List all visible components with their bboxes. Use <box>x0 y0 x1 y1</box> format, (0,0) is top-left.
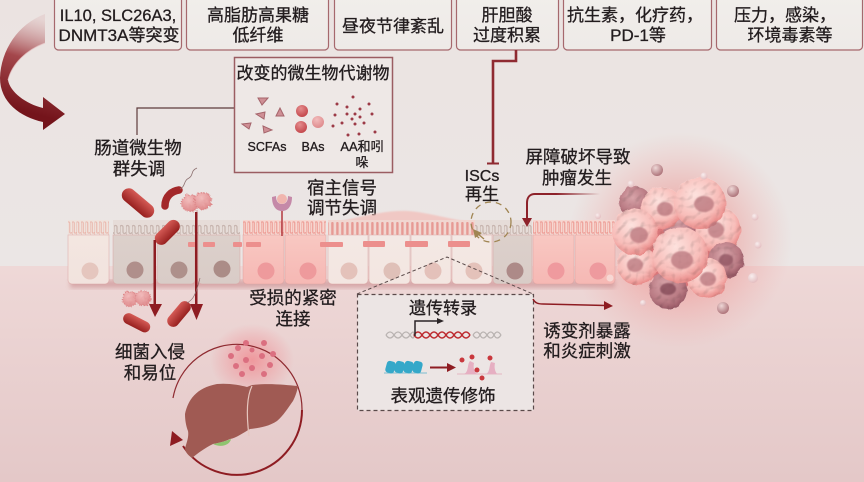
box: mutations: IL10, SLC26A3, <box>60 7 176 25</box>
arrow: mutagen exposure <box>533 299 613 310</box>
tumour mass <box>595 164 762 314</box>
liver <box>185 384 298 458</box>
label: host signalling: 调节失调 <box>307 198 377 218</box>
heading: epigenetic modification: 表观遗传修饰 <box>390 386 496 406</box>
cycle arc <box>173 344 302 410</box>
tumour nuclei <box>627 196 733 295</box>
box: mutations <box>54 0 182 50</box>
icon: epigenetic modification <box>457 354 502 380</box>
label: host signalling <box>307 178 377 218</box>
inhibition line from bile acids to ISCs <box>487 50 516 164</box>
label: barrier damage: 肿瘤发生 <box>542 168 612 188</box>
label: bacterial invasion: 和易位 <box>124 363 176 383</box>
icon: AA and indole dots <box>332 96 376 136</box>
shadow <box>70 280 615 288</box>
microvilli <box>68 220 615 235</box>
factor boxes row <box>54 0 862 50</box>
glow <box>210 324 294 396</box>
label: dysbiosis <box>94 138 182 179</box>
label: mutagen exposure and inflammation: 诱变剂暴露 <box>543 321 631 341</box>
label: damaged tight junction: 连接 <box>276 309 310 329</box>
label: bacterial invasion: 细菌入侵 <box>115 342 185 362</box>
ISC dashed circle <box>471 202 511 242</box>
metabolite labels: SCFAs <box>248 140 286 154</box>
label: dysbiosis: 群失调 <box>113 159 165 179</box>
metabolite labels: AA和吲 <box>340 139 384 154</box>
icon: bacteria above epithelium <box>119 168 212 248</box>
box: circadian: 昼夜节律紊乱 <box>342 17 444 36</box>
label: ISC regeneration <box>465 168 499 204</box>
dashed zoom lines <box>357 257 533 294</box>
connector: metabolites to dysbiosis <box>137 108 234 135</box>
box: drugs: 抗生素，化疗药， <box>567 6 703 25</box>
floating spheres <box>595 164 762 314</box>
label: ISC regeneration: 再生 <box>465 185 499 204</box>
gallbladder <box>213 439 231 446</box>
box: stress <box>716 0 862 50</box>
tumour cells <box>612 177 744 309</box>
label: host signalling: 宿主信号 <box>307 178 377 198</box>
cells <box>68 235 615 284</box>
panel: altered microbial metabolites <box>234 58 392 172</box>
liver circle with cycle arrow <box>170 324 302 475</box>
label: damaged tight junction: 受损的紧密 <box>249 288 337 308</box>
panel title: 改变的微生物代谢物 <box>236 64 390 83</box>
bacteria dots <box>228 340 276 377</box>
box: bile acids: 过度积累 <box>473 26 541 45</box>
heading: transcription: 遗传转录 <box>409 299 477 318</box>
box: bile acids <box>456 0 558 50</box>
metabolite labels: 哚 <box>355 155 369 170</box>
box: stress: 环境毒素等 <box>748 26 832 45</box>
box: bile acids: 肝胆酸 <box>482 6 532 25</box>
nuclei <box>82 260 614 282</box>
panel: transcription and epigenetics <box>358 294 534 410</box>
liver fissure <box>247 386 252 436</box>
epithelium <box>68 211 615 288</box>
metabolite labels: BAs <box>302 140 324 154</box>
box: drugs <box>564 0 712 50</box>
arrows: bacterial translocation <box>149 212 203 320</box>
arrow: barrier damage to epithelium <box>522 194 600 227</box>
icon: BAs spheres <box>295 105 324 133</box>
box: mutations: DNMT3A等突变 <box>59 26 179 45</box>
icon: receptor <box>272 194 292 236</box>
label: bacterial invasion <box>115 342 185 383</box>
box: diet: 高脂肪高果糖 <box>207 6 309 25</box>
label: ISC regeneration: ISCs <box>465 168 499 185</box>
box: circadian <box>334 0 452 50</box>
arrow: nucleosome to modification <box>430 363 456 372</box>
icon: DNA with promoter arrow <box>386 318 501 338</box>
label: mutagen exposure and inflammation: 和炎症刺激 <box>543 341 631 361</box>
label: barrier damage <box>526 147 630 188</box>
label: mutagen exposure and inflammation <box>543 321 631 361</box>
mucus mound <box>336 211 470 222</box>
label: barrier damage: 屏障破坏导致 <box>526 147 630 167</box>
curved arrow top left <box>0 14 65 130</box>
box: diet <box>186 0 328 50</box>
icon: translocated bacteria <box>121 278 200 334</box>
metabolite labels <box>248 139 384 170</box>
box: stress: 压力，感染， <box>734 6 836 25</box>
tight junction marks <box>188 241 470 247</box>
box: drugs: PD-1等 <box>610 26 666 45</box>
label: dysbiosis: 肠道微生物 <box>94 138 182 158</box>
box: diet: 低纤维 <box>232 26 284 45</box>
icon: nucleosome <box>384 360 427 374</box>
icon: SCFAs triangles <box>242 98 284 133</box>
label: damaged tight junction <box>249 288 337 329</box>
